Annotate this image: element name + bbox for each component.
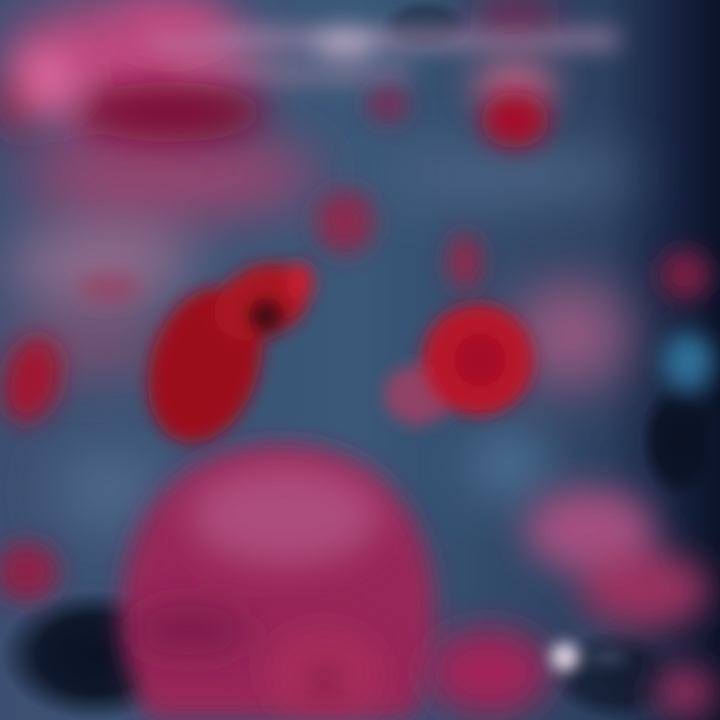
bottom right pink cells <box>426 488 715 716</box>
logo highlight <box>551 643 625 671</box>
top cells <box>0 2 560 142</box>
panel: upper left pink haze <box>5 0 320 373</box>
bottom cell highlight <box>130 465 380 713</box>
cell: left red <box>0 276 142 602</box>
panel: right pink haze and blue patches <box>55 150 640 530</box>
bottom large pink cell <box>122 445 435 720</box>
cell: large kidney-shaped red cell <box>129 248 323 458</box>
cell: round red cell <box>384 304 534 425</box>
heading band (blurred title) <box>150 27 620 82</box>
cell: upper right red <box>315 88 714 392</box>
